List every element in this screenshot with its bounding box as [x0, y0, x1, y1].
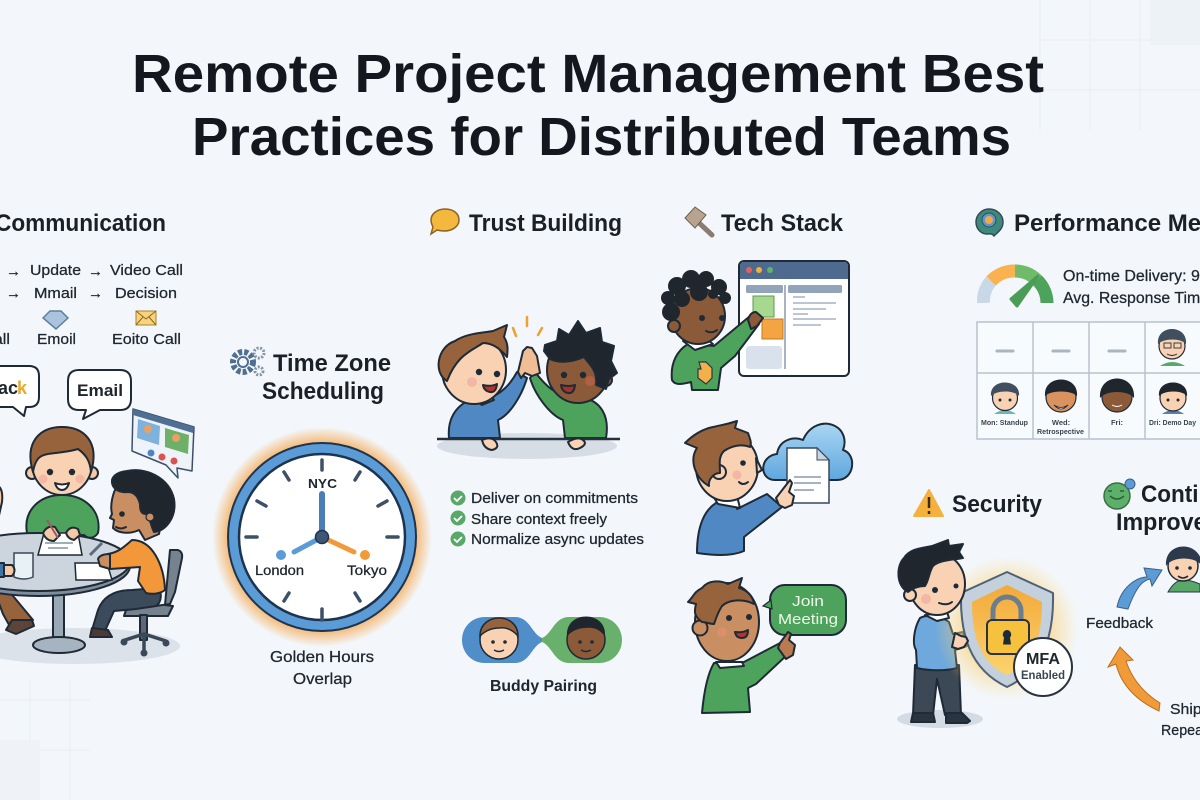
illustration: person with shield — [897, 540, 1079, 728]
panel: communication — [0, 210, 194, 664]
checklist: Deliver on commitments — [471, 491, 638, 507]
checklist: Normalize async updates — [471, 532, 644, 548]
label: feedback: Feedback — [1086, 615, 1154, 632]
illustration: kanban window and person — [661, 261, 849, 390]
heading: continuous improvement — [1116, 481, 1200, 536]
clock: London — [255, 562, 304, 578]
person: right with orange sweater — [90, 470, 182, 656]
heading: security: Security — [952, 491, 1043, 518]
MFA badge: Enabled — [1021, 670, 1065, 682]
illustration: join meeting person — [688, 578, 846, 713]
caption: golden hours overlap: Overlap — [293, 671, 352, 688]
face: glasses — [1158, 329, 1186, 366]
label: ship and repeat — [1161, 701, 1200, 739]
title — [132, 44, 1044, 167]
icon: speech bubble — [431, 209, 459, 234]
MFA badge: MFA — [1026, 651, 1060, 668]
checklist: Share context freely — [471, 512, 608, 528]
illustration: high five — [437, 317, 620, 459]
heading: communication: Communication — [0, 210, 166, 237]
caption: golden hours overlap: Golden Hours — [270, 649, 374, 666]
bubble: email — [68, 370, 131, 419]
panel: trust building — [431, 209, 644, 695]
calendar grid — [977, 322, 1200, 439]
heading: time zone scheduling — [262, 350, 391, 405]
communication flow text: → — [88, 263, 103, 280]
heading: trust building: Trust Building — [469, 210, 622, 237]
icon: handshake — [43, 311, 68, 329]
bubble: email: Email — [77, 381, 123, 400]
icon: gears — [233, 348, 264, 375]
title: Practices for Distributed Teams — [192, 107, 1011, 167]
hands — [518, 347, 540, 378]
communication flow text: Video Call — [110, 262, 183, 279]
caption: buddy pairing: Buddy Pairing — [490, 678, 597, 695]
table — [0, 520, 130, 653]
bubble: slack — [0, 366, 39, 416]
face: friday — [1100, 378, 1134, 412]
calendar grid: Wed: — [1052, 418, 1070, 427]
checklist — [450, 490, 644, 548]
communication flow text: → — [6, 285, 21, 302]
panel: security — [897, 490, 1079, 728]
gauge — [983, 271, 1047, 306]
face: demo day — [1159, 382, 1187, 414]
left head — [439, 325, 508, 404]
illustration: join meeting person: Meeting — [778, 611, 838, 628]
communication flow text: Mmail — [34, 285, 77, 302]
panel: tech stack — [661, 207, 852, 713]
bubble: slack: k — [17, 378, 28, 398]
table shadow — [0, 628, 180, 664]
person: center — [26, 427, 99, 538]
face: monday — [991, 382, 1019, 414]
communication flow text: Emoil — [37, 331, 76, 348]
panel: time zone scheduling — [212, 348, 432, 688]
icon: warning triangle — [914, 490, 943, 516]
clock: NYC — [308, 476, 338, 491]
calendar grid: Fri: — [1111, 418, 1123, 427]
panel: performance metrics — [976, 209, 1200, 439]
MFA badge — [1014, 638, 1072, 696]
icon: hammer — [685, 207, 712, 235]
calendar grid: Retrospective — [1037, 427, 1084, 436]
calendar grid: Mon: Standup — [981, 418, 1028, 427]
communication flow text: Decision — [115, 285, 177, 302]
clock: Tokyo — [347, 562, 387, 578]
arrow: back to feedback — [1108, 647, 1160, 711]
title: Remote Project Management Best — [132, 44, 1044, 104]
communication flow text: Eoito Call — [112, 331, 181, 348]
heading: time zone scheduling: Time Zone — [273, 350, 391, 377]
communication flow text: Update — [30, 262, 81, 279]
illustration: cloud upload person — [685, 421, 852, 555]
right head — [544, 321, 617, 403]
arrow: up to team member — [1117, 568, 1162, 609]
face: wednesday — [1045, 380, 1077, 412]
communication flow text: → — [88, 285, 103, 302]
icon: video call window — [132, 409, 194, 478]
metric text — [1063, 268, 1200, 307]
buddy pairing graphic — [462, 616, 622, 663]
illustration: join meeting person: Join — [792, 593, 824, 610]
icon: performance badge — [976, 209, 1003, 236]
person: left, partly cropped — [0, 484, 34, 634]
panel: continuous improvement — [1086, 479, 1200, 739]
calendar grid: Dri: Demo Day — [1149, 418, 1197, 427]
clock — [212, 427, 432, 647]
face: team member — [1166, 546, 1200, 592]
heading: tech stack: Tech Stack — [721, 210, 844, 237]
icon: smiling badge — [1104, 479, 1135, 509]
icon: envelope — [136, 311, 156, 325]
communication flow text: → — [6, 263, 21, 280]
communication flow text — [0, 262, 183, 348]
caption: golden hours overlap — [270, 649, 374, 688]
heading: time zone scheduling: Scheduling — [262, 378, 384, 405]
